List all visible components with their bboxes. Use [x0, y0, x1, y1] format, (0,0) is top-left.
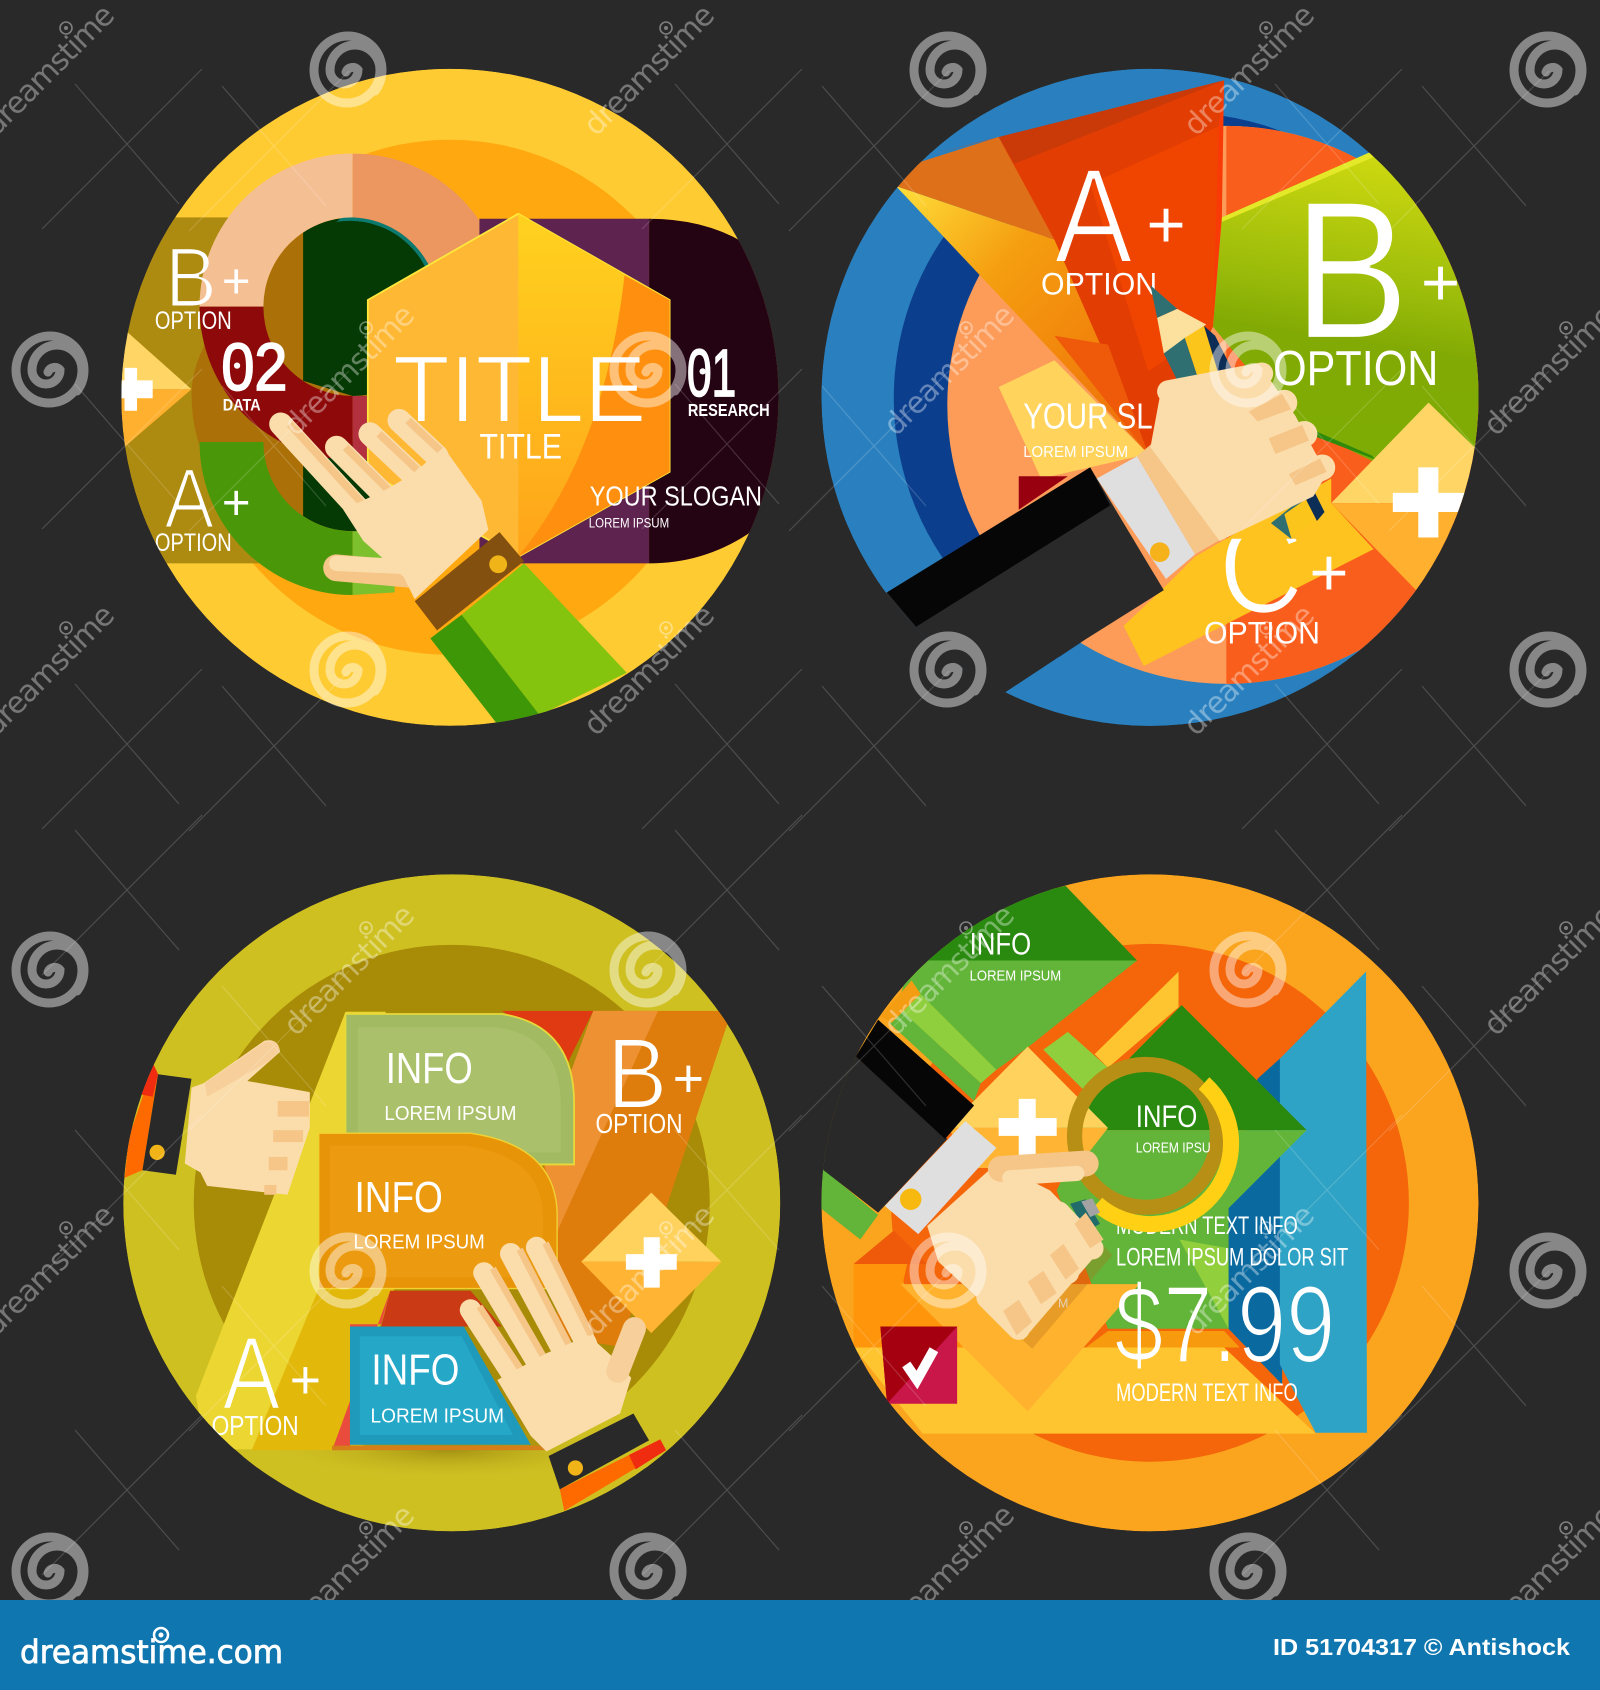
arrow with plus [121, 327, 192, 450]
panel: circle 1 title hexagon [118, 69, 823, 726]
text: info and option labels: A [222, 1316, 281, 1431]
text: option labels: YOUR SL [1023, 397, 1153, 437]
text: info and price: MODERN TEXT INFO [1116, 1380, 1298, 1407]
blue column [1229, 972, 1367, 1433]
text: info and option labels: INFO [354, 1173, 443, 1222]
checkbox [880, 1326, 957, 1404]
text: info and price: INFO [1136, 1099, 1197, 1134]
text: option labels: + [1421, 245, 1460, 320]
watermark text: dreamstime [877, 898, 1022, 1043]
watermark text: dreamstime [1177, 0, 1322, 143]
watermark text: dreamstime [577, 598, 722, 743]
footer logo: dreamstime.com [20, 1633, 283, 1671]
text: info and option labels: OPTION [596, 1108, 683, 1139]
footer bar [0, 1600, 1600, 1690]
text: option labels: OPTION [1041, 267, 1157, 302]
text: info and option labels: INFO [371, 1346, 459, 1395]
text: info and price: LOREM IPSUM DOLOR SIT [1116, 1244, 1348, 1271]
right green diamond [1057, 1005, 1307, 1329]
text: option, data and title labels: LOREM IPSUM [589, 516, 669, 531]
text: option labels: B [1293, 160, 1409, 380]
text: info and option labels: LOREM IPSUM [371, 1404, 504, 1427]
watermark text: dreamstime [577, 0, 722, 143]
text: option, data and title labels: A [164, 451, 215, 546]
text: option, data and title labels: DATA [223, 396, 261, 415]
plus diamond [1332, 402, 1475, 590]
text: option labels: A [1054, 142, 1133, 291]
orange info card [319, 1133, 557, 1289]
text: option, data and title labels: OPTION [155, 530, 232, 557]
text: info and price: LOREM IPSU [1136, 1139, 1211, 1156]
text: info and option labels: INFO [386, 1044, 473, 1093]
hand holding pencil with white cuff [1097, 371, 1327, 579]
dark sleeve [886, 467, 1164, 692]
watermark text: dreamstime [577, 1198, 722, 1343]
magnifier [1070, 1064, 1231, 1231]
yellow C band [1124, 479, 1374, 666]
text: option, data and title labels: 01 [687, 336, 736, 411]
watermark text: dreamstime [1177, 1198, 1322, 1343]
bottom yellow band [854, 1347, 1316, 1434]
text: info and price [970, 927, 1348, 1407]
text: option, data and title labels: TITLE [479, 427, 562, 466]
text: info and price: LOREM IPSUM [970, 968, 1061, 985]
right hand [471, 1243, 666, 1511]
text: option labels: + [1309, 536, 1349, 611]
text: info and price: M [1058, 1296, 1068, 1310]
yellow slogan label [999, 360, 1148, 510]
watermark text: dreamstime [1177, 598, 1322, 743]
text: info and option labels: B [607, 1018, 667, 1130]
footer credit: ID 51704317 © Antishock [1273, 1634, 1570, 1660]
plus diamond [581, 1193, 721, 1333]
panel: circle 3 info cards [123, 874, 780, 1531]
text: info and price: $7.99 [1114, 1264, 1335, 1386]
text: option, data and title labels: 02 [221, 330, 287, 405]
watermark text: dreamstime [877, 1498, 1022, 1643]
left hand [125, 1040, 310, 1195]
text: option, data and title labels: + [222, 477, 250, 531]
green B panel [1213, 152, 1478, 461]
panel: circle 4 price and magnifier [818, 874, 1479, 1531]
text: info and option labels [212, 1018, 704, 1441]
text: option labels [1023, 142, 1460, 651]
text: info and option labels: + [290, 1351, 321, 1410]
left plus diamond [900, 1047, 1139, 1411]
hexagon [368, 214, 670, 557]
dark sleeve with green [818, 1020, 974, 1239]
text: option, data and title labels [155, 230, 770, 557]
text: info and option labels: LOREM IPSUM [384, 1102, 516, 1125]
panel: circle 2 pencil options [822, 68, 1479, 726]
orange box [854, 1231, 965, 1347]
text: info and option labels: + [673, 1050, 704, 1109]
text: option, data and title labels: RESEARCH [688, 400, 770, 420]
text: modern text info top line: MODERN TEXT INFO [1116, 1213, 1298, 1240]
pencil [1150, 285, 1325, 539]
text: option labels: OPTION [1273, 342, 1438, 396]
text: option, data and title labels: YOUR SLOGAN [590, 480, 762, 511]
text: info and price: INFO [970, 927, 1031, 962]
green info card [346, 1014, 574, 1164]
watermark text: dreamstime [277, 898, 422, 1043]
text: option labels: C [1219, 492, 1304, 641]
text: option, data and title labels: + [222, 255, 250, 309]
text: option labels: OPTION [1204, 616, 1320, 651]
text: option, data and title labels: OPTION [155, 308, 232, 335]
text: option, data and title labels: TITLE [393, 337, 646, 443]
hand holding magnifier [885, 1121, 1112, 1349]
blue info card [350, 1326, 531, 1445]
red triangle A panel [896, 80, 1224, 454]
text: option labels: + [1146, 187, 1186, 262]
text: info and option labels: OPTION [212, 1410, 299, 1441]
text: info and option labels: LOREM IPSUM [354, 1230, 485, 1253]
watermark text: dreamstime [277, 298, 422, 443]
watermark text: dreamstime [277, 1498, 422, 1643]
text: option, data and title labels: B [165, 230, 217, 325]
text: option labels: LOREM IPSUM [1023, 443, 1128, 461]
hand pointing with green sleeve [281, 421, 627, 724]
watermark text: dreamstime [877, 298, 1022, 443]
top green diamond [880, 886, 1137, 1101]
